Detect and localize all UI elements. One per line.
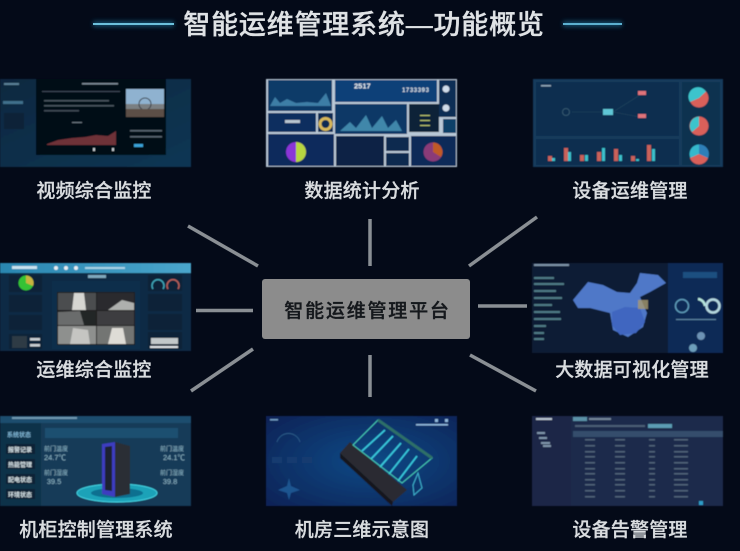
panel: cabinet control: 热能管理 xyxy=(8,461,32,469)
panel: cabinet control: 24.7℃ xyxy=(44,453,67,462)
label: big data visualization: 大数据可视化管理 xyxy=(555,359,709,381)
label: video monitoring: 视频综合监控 xyxy=(36,180,152,202)
panel: 3D machine room xyxy=(266,416,457,506)
label: equipment operations: 设备运维管理 xyxy=(572,180,688,202)
panel: operations monitoring xyxy=(0,263,191,351)
panel: data statistics: 1733393 xyxy=(402,88,430,94)
label: operations monitoring: 运维综合监控 xyxy=(36,359,152,381)
panel: cabinet control: 报警记录 xyxy=(8,446,32,454)
panel: equipment operations xyxy=(533,79,723,167)
label: data statistics: 数据统计分析 xyxy=(304,180,420,202)
panel: cabinet control: 39.5 xyxy=(47,477,61,486)
panel: cabinet control xyxy=(0,416,191,506)
panel: big data visualization xyxy=(532,263,723,353)
panel: data statistics xyxy=(266,79,457,167)
panel: device alarms xyxy=(532,416,723,506)
label: 3D machine room: 机房三维示意图 xyxy=(295,519,429,541)
title: 智能运维管理系统—功能概览 xyxy=(183,10,545,40)
panel: cabinet control: 配电状态 xyxy=(8,476,32,484)
panel: cabinet control: 前门湿度 xyxy=(44,469,68,477)
connector lines xyxy=(188,217,537,397)
panel: cabinet control: 24.1℃ xyxy=(163,453,186,462)
panel: cabinet control: 系统状态 xyxy=(7,431,31,439)
panel: cabinet control: 前门温度 xyxy=(160,445,184,453)
label: cabinet control: 机柜控制管理系统 xyxy=(19,519,173,541)
panel: video monitoring xyxy=(0,79,191,167)
panel: cabinet control: 39.8 xyxy=(163,477,177,486)
center box: 智能运维管理平台 xyxy=(284,300,451,322)
panel: data statistics: 2517 xyxy=(354,82,371,90)
panel: cabinet control: 前门湿度 xyxy=(160,469,184,477)
panel: cabinet control: 环境状态 xyxy=(8,491,32,499)
label: device alarms: 设备告警管理 xyxy=(572,519,688,541)
center box xyxy=(262,279,470,339)
panel: cabinet control: 前门温度 xyxy=(44,445,68,453)
title xyxy=(93,10,622,40)
